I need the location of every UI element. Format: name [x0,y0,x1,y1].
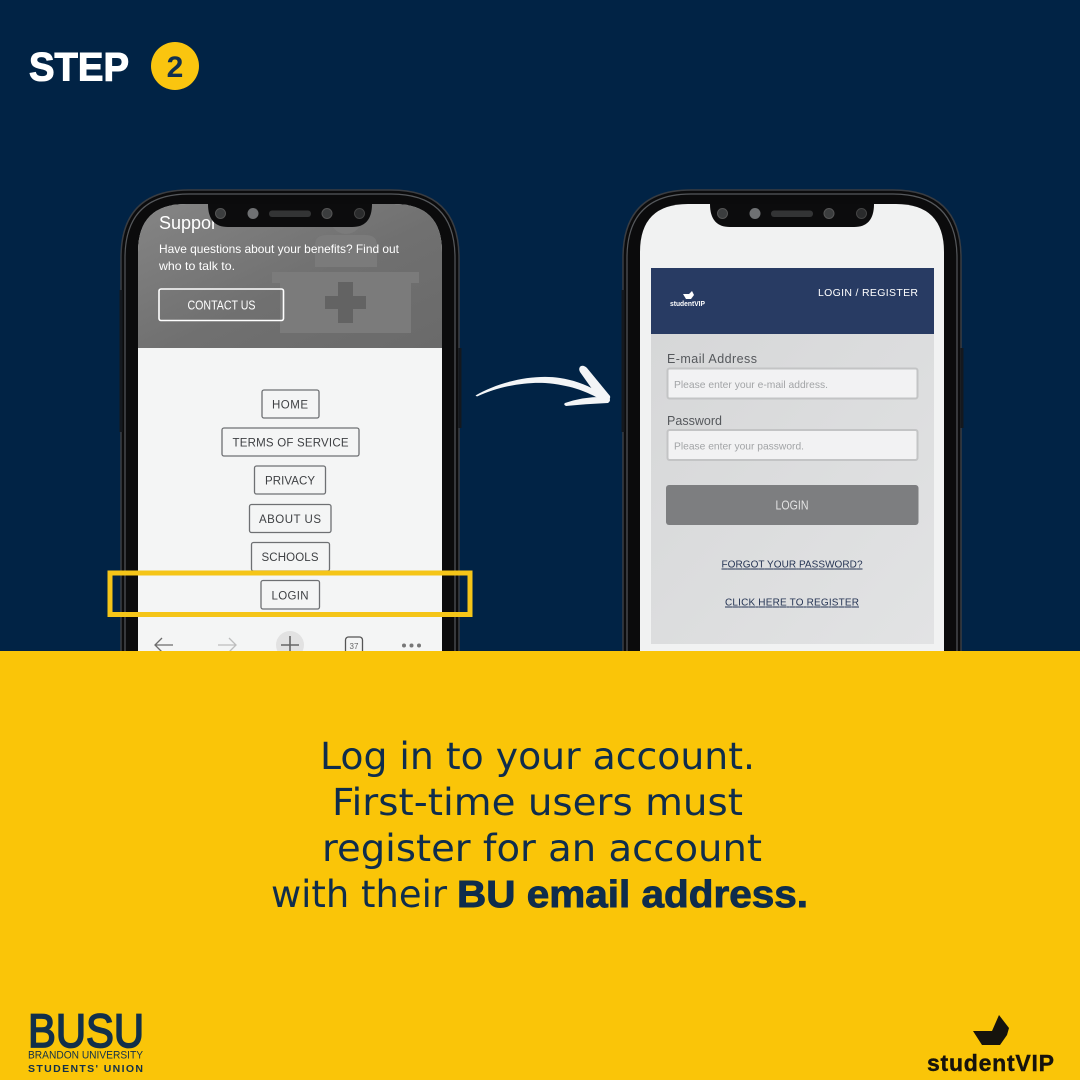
privacy button: PRIVACY [265,476,315,488]
menu buttons [222,390,359,609]
yellow bottom panel [0,651,1080,1080]
register link: CLICK HERE TO REGISTER [725,598,859,608]
icon: studentVIP mark [973,1015,1009,1045]
site header bar: studentVIP [670,301,705,308]
email input [668,368,918,398]
login form panel [651,334,934,644]
password input: Please enter your password. [674,440,804,452]
support banner: Have questions about your benefits? Find out [159,242,400,256]
login submit button: LOGIN [776,498,808,512]
browser toolbar [154,631,421,651]
login button: LOGIN [272,590,308,602]
main instruction text: register for an account [322,827,762,870]
login button [261,580,320,609]
password input [668,430,918,460]
support banner [138,202,442,348]
phone body left [121,190,459,700]
login form panel: Password [667,414,722,428]
login submit button [666,485,918,525]
heading: step 2: 2 [167,51,183,84]
support banner: Suppor [159,213,217,233]
BUSU logo: BUSU [28,1004,144,1057]
arrow: from menu to login form [476,366,610,406]
email input: Please enter your e-mail address. [674,379,828,391]
icon: medical desk [272,235,419,333]
phone body right [623,190,961,700]
terms of service button: TERMS OF SERVICE [232,438,349,450]
privacy button [254,466,326,494]
site header bar: LOGIN / REGISTER [818,287,918,299]
phone screen right [640,204,944,664]
browser toolbar: 37 [350,642,359,651]
terms of service button [222,428,359,456]
schools button: SCHOOLS [262,552,319,564]
BUSU logo: STUDENTS' UNION [28,1063,143,1075]
heading: step 2 [29,42,199,90]
main instruction text: First-time users must [332,781,743,824]
main instruction text: with their [271,873,448,916]
studentVIP logo: studentVIP [927,1050,1054,1076]
site header bar [651,268,934,334]
main instruction text: BU email address. [457,874,808,916]
contact us button [159,289,284,320]
icon: studentVIP mini logo [683,291,694,299]
forgot password link: FORGOT YOUR PASSWORD? [722,560,863,570]
about us button: ABOUT US [259,514,321,526]
about us button [250,504,331,532]
main instruction text [271,735,808,916]
contact us button: CONTACT US [188,298,256,312]
phone: menu screen [121,190,460,700]
home button [262,390,319,418]
phone screen left [138,202,442,664]
phone: login form screen [623,190,962,700]
studentVIP logo [927,1015,1054,1076]
home button: HOME [272,400,308,412]
support banner: who to talk to. [158,259,235,273]
login form panel: E-mail Address [667,352,757,366]
schools button [252,542,330,571]
highlight box around login [110,573,470,614]
BUSU logo: BRANDON UNIVERSITY [28,1050,144,1062]
phone notch left [208,204,372,227]
phone notch right [710,204,874,227]
heading: step 2: STEP [29,46,129,90]
main instruction text: Log in to your account. [320,735,755,778]
